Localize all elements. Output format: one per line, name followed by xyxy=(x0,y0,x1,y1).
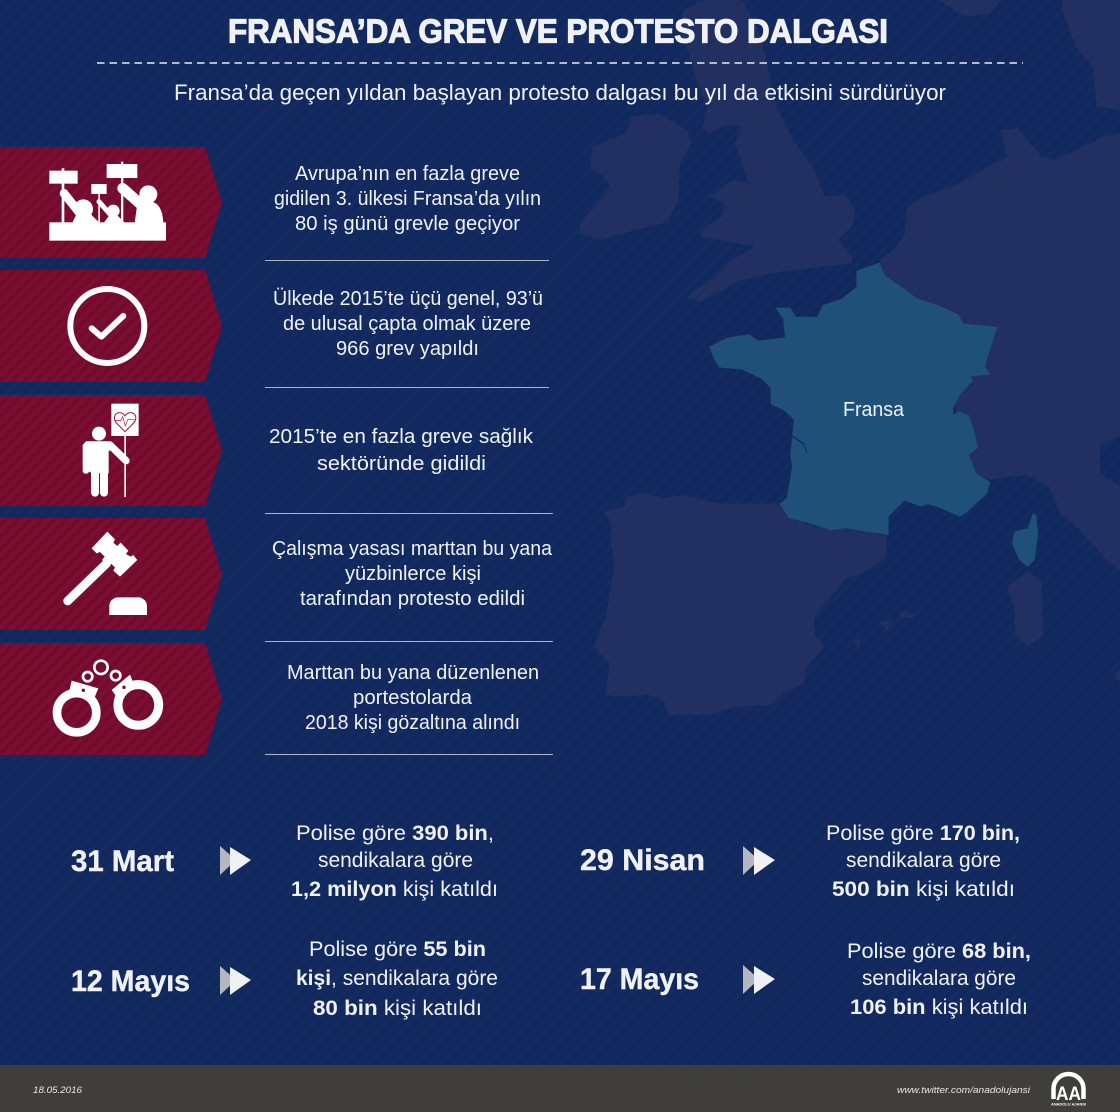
map label: Fransa: Fransa xyxy=(843,399,905,421)
text block: fact 1 xyxy=(274,163,541,235)
arrow: 29 Nisan xyxy=(743,846,775,875)
date: 17 Mayıs: 17 Mayıs xyxy=(580,963,699,996)
text block: 17 Mayıs figures xyxy=(847,940,1031,1019)
text block: fact 4 xyxy=(272,538,553,610)
text block: 17 Mayıs figures: Polise göre 68 bin, xyxy=(847,940,1031,963)
text block: 17 Mayıs figures: 106 bin kişi katıldı xyxy=(850,996,1028,1019)
text block: fact 3 xyxy=(269,426,534,475)
background map of Europe xyxy=(580,0,1120,715)
text block: fact 4: yüzbinlerce kişi xyxy=(345,563,481,585)
footer date: 18.05.2016 xyxy=(33,1085,82,1095)
icon: Anadolu Agency logo xyxy=(1051,1074,1086,1106)
subtitle: Fransa’da geçen yıldan başlayan protesto dalgası bu yıl da etkisini sürdürüyor xyxy=(174,80,946,105)
arrow: 31 Mart xyxy=(220,846,251,875)
text block: 12 Mayıs figures: 80 bin kişi katıldı xyxy=(313,997,482,1020)
arrow: 17 Mayıs xyxy=(743,965,775,994)
icon: Anadolu Agency logo: AA xyxy=(1056,1084,1081,1105)
text block: fact 1: Avrupa’nın en fazla greve xyxy=(295,163,520,185)
text block: 12 Mayıs figures: Polise göre 55 bin xyxy=(309,938,486,961)
text block: 31 Mart figures: sendikalara göre xyxy=(318,849,473,872)
text block: fact 3: 2015’te en fazla greve sağlık xyxy=(269,426,534,448)
text block: 29 Nisan figures: 500 bin kişi katıldı xyxy=(832,878,1015,901)
text block: 31 Mart figures xyxy=(291,822,498,901)
footer bar xyxy=(0,1065,1120,1112)
text block: 31 Mart figures: 1,2 milyon kişi katıldı xyxy=(291,878,498,901)
text block: fact 2 xyxy=(273,288,543,360)
title divider xyxy=(97,62,1023,64)
arrow: 12 Mayıs xyxy=(220,966,251,995)
text block: fact 2: 966 grev yapıldı xyxy=(336,338,479,360)
icon: handcuffs xyxy=(57,661,159,732)
title: FRANSA’DA GREV VE PROTESTO DALGASI xyxy=(228,12,888,50)
text block: fact 4: tarafından protesto edildi xyxy=(300,588,525,610)
text block: fact 5: portestolarda xyxy=(353,687,473,709)
text block: fact 2: Ülkede 2015’te üçü genel, 93’ü xyxy=(273,288,543,310)
date: 29 Nisan: 29 Nisan xyxy=(580,844,705,877)
date: 31 Mart: 31 Mart xyxy=(71,845,174,878)
icon: check mark in circle xyxy=(70,289,144,363)
text block: 12 Mayıs figures: kişi, sendikalara göre xyxy=(296,967,498,990)
text block: fact 5: Marttan bu yana düzenlenen xyxy=(287,662,539,684)
panel: icon band 2 xyxy=(0,270,222,382)
text block: fact 5 xyxy=(287,662,539,734)
text block: 29 Nisan figures: sendikalara göre xyxy=(846,849,1001,872)
panel: icon band 5 xyxy=(0,643,222,755)
map: France highlighted xyxy=(709,263,1038,567)
panel: icon band 3 xyxy=(0,395,222,506)
text block: 12 Mayıs figures xyxy=(296,938,498,1020)
footer link: www.twitter.com/anadolujansi xyxy=(897,1085,1031,1095)
text block: 29 Nisan figures: Polise göre 170 bin, xyxy=(826,822,1020,845)
text block: 29 Nisan figures xyxy=(826,822,1020,901)
icon: person with health sign xyxy=(83,404,139,497)
date: 12 Mayıs: 12 Mayıs xyxy=(71,965,190,998)
panel: icon band 4 xyxy=(0,518,222,630)
text block: 17 Mayıs figures: sendikalara göre xyxy=(862,967,1016,990)
text block: 31 Mart figures: Polise göre 390 bin, xyxy=(296,822,494,845)
text block: fact 1: 80 iş günü grevle geçiyor xyxy=(295,213,520,235)
text block: fact 3: sektöründe gidildi xyxy=(317,453,486,475)
icon: protesters with signs xyxy=(49,162,166,241)
text block: fact 5: 2018 kişi gözaltına alındı xyxy=(305,712,520,734)
icon: Anadolu Agency logo: ANADOLU AJANSI xyxy=(1051,1102,1086,1106)
text block: fact 2: de ulusal çapta olmak üzere xyxy=(283,313,531,335)
text block: fact 1: gidilen 3. ülkesi Fransa’da yılın xyxy=(274,188,541,210)
panel: icon band 1 xyxy=(0,147,222,258)
icon: gavel xyxy=(68,532,147,615)
text block: fact 4: Çalışma yasası marttan bu yana xyxy=(272,538,553,560)
